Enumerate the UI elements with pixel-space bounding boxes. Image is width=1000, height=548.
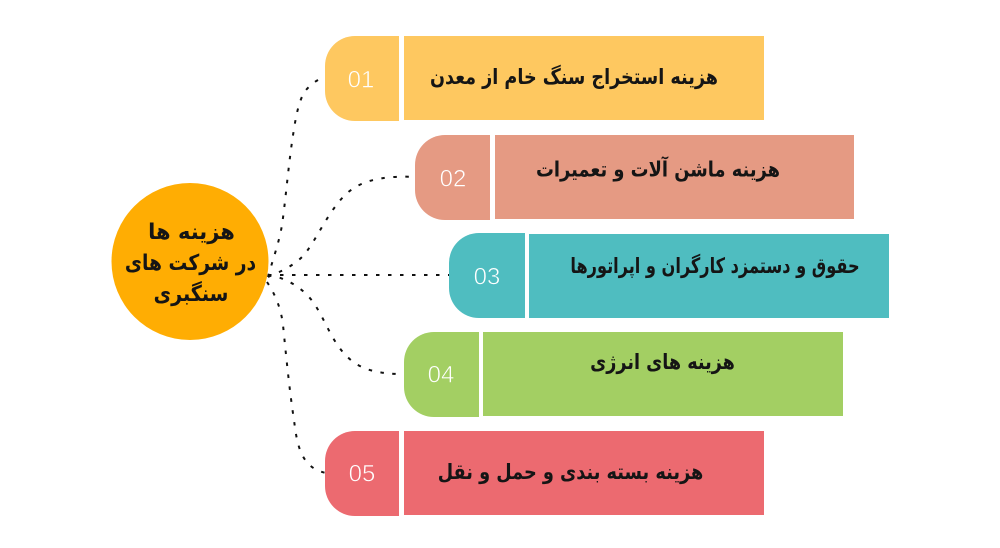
item 02: 02	[440, 166, 466, 192]
central circle title	[125, 220, 256, 306]
item 04: هزینه های انرژی	[590, 349, 735, 374]
dotted connector to item 02	[268, 177, 418, 277]
item 03: حقوق و دستمزد کارگران و اپراتورها	[570, 253, 860, 279]
item 05: هزینه بسته بندی و حمل و نقل	[438, 459, 703, 484]
item 04	[404, 332, 843, 417]
item 05	[325, 431, 764, 516]
central circle title: سنگبری	[154, 281, 228, 306]
central circle	[112, 183, 268, 340]
central circle title: هزینه ها	[148, 220, 235, 245]
central circle title: در شرکت های	[125, 250, 256, 275]
dotted connector to item 05	[267, 282, 326, 473]
dotted connector to item 01	[268, 77, 325, 277]
item 03	[449, 233, 889, 318]
item 01	[325, 36, 764, 121]
dotted connector to item 04	[268, 275, 403, 374]
item 03: 03	[474, 264, 500, 290]
item 01: هزینه استخراج سنگ خام از معدن	[430, 64, 718, 89]
dotted connector to item 03	[268, 274, 450, 276]
item 05: 05	[349, 460, 375, 488]
item 04: 04	[428, 362, 454, 388]
item 02	[415, 135, 854, 220]
item 01: 01	[348, 66, 374, 94]
item 02: هزینه ماشن آلات و تعمیرات	[536, 156, 780, 182]
